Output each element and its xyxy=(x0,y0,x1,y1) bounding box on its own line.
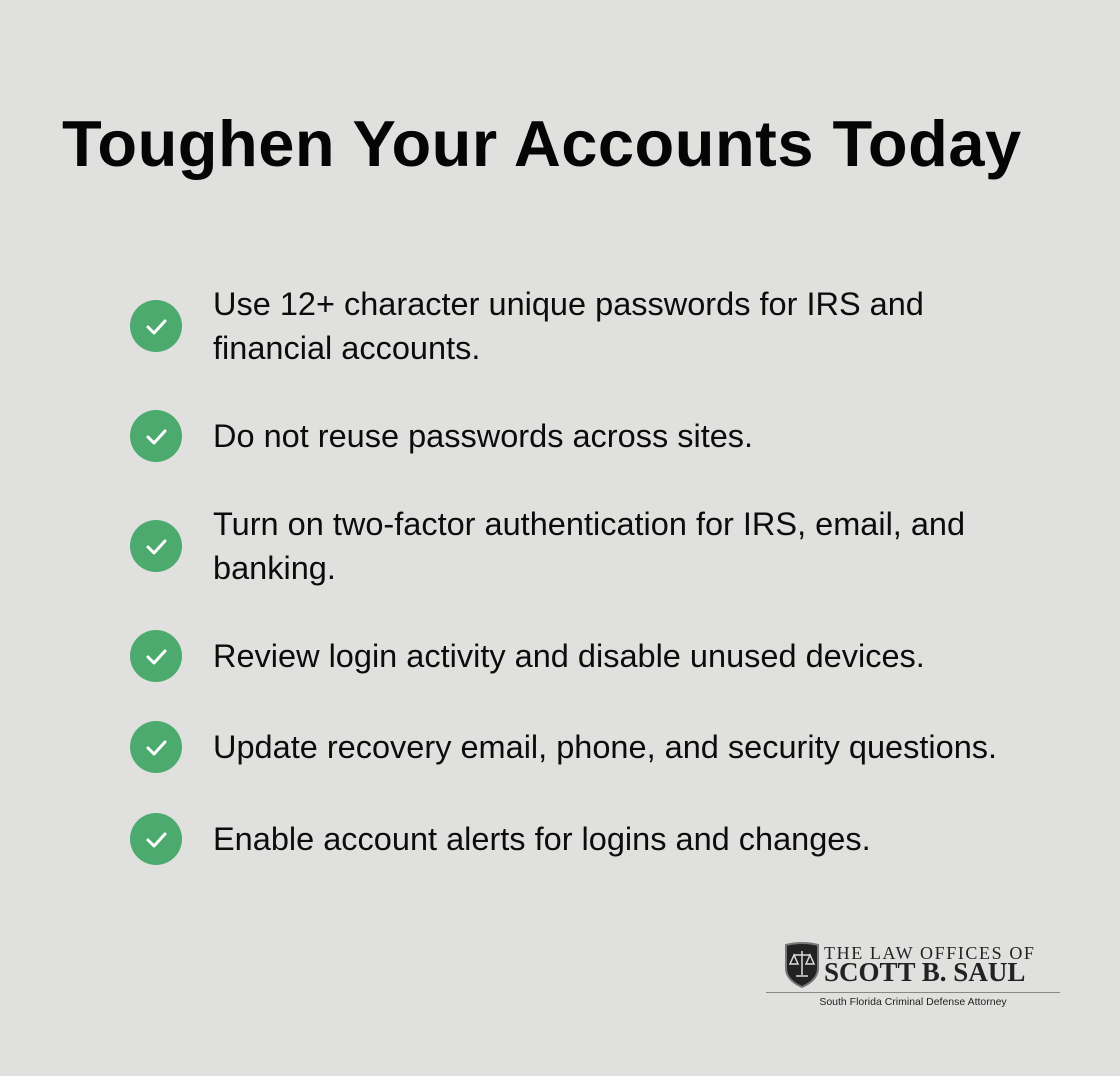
icon: check xyxy=(130,520,182,572)
item 4 xyxy=(130,630,925,682)
text: financial accounts. xyxy=(213,330,480,366)
text xyxy=(213,506,965,586)
text: Use 12+ character unique passwords for IRS and xyxy=(213,286,924,322)
item 6 xyxy=(130,813,871,865)
logo: SCOTT B. SAUL xyxy=(824,957,1025,987)
icon: check xyxy=(130,630,182,682)
text: Do not reuse passwords across sites. xyxy=(213,418,753,454)
title: Toughen Your Accounts Today xyxy=(62,107,1022,180)
text: banking. xyxy=(213,550,336,586)
text: Update recovery email, phone, and security questions. xyxy=(213,729,997,765)
text: Turn on two-factor authentication for IRS, email, and xyxy=(213,506,965,542)
text: Review login activity and disable unused devices. xyxy=(213,638,925,674)
logo: South Florida Criminal Defense Attorney xyxy=(819,996,1007,1008)
item 1 xyxy=(130,286,924,366)
item 5 xyxy=(130,721,997,773)
icon: check xyxy=(130,813,182,865)
logo text: THE LAW OFFICES OF xyxy=(824,943,1036,963)
logo xyxy=(766,942,1060,1008)
text: Enable account alerts for logins and changes. xyxy=(213,821,871,857)
item 2 xyxy=(130,410,753,462)
text xyxy=(213,286,924,366)
icon: check xyxy=(130,300,182,352)
icon: check xyxy=(130,721,182,773)
icon: shield with scales xyxy=(785,942,819,988)
icon: check xyxy=(130,410,182,462)
item 3 xyxy=(130,506,965,586)
